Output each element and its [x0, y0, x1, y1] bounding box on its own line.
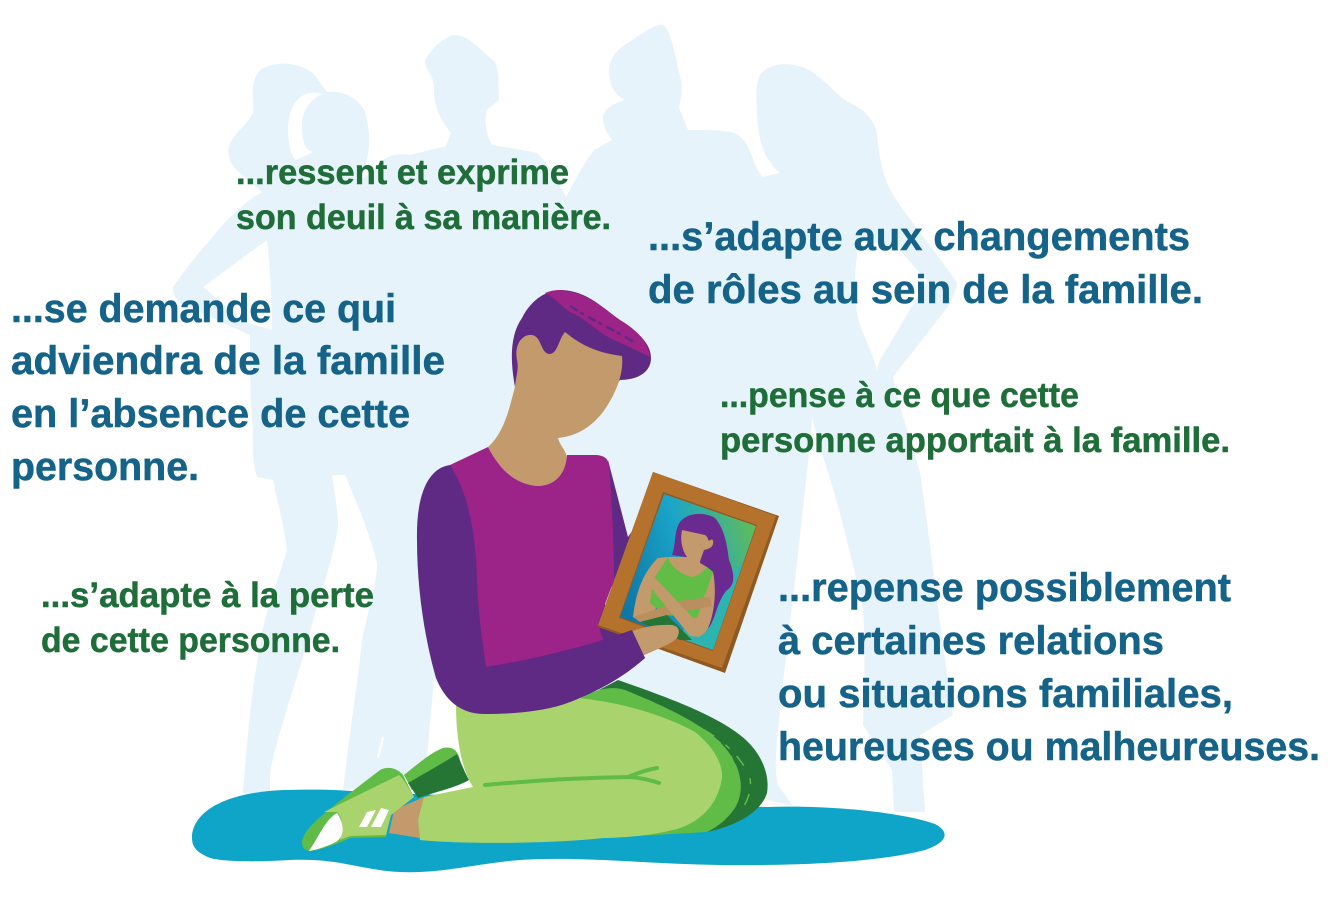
background family silhouettes: [173, 25, 957, 812]
portrait background: [620, 494, 756, 650]
illustration: kneeling person holding a portrait: [302, 290, 779, 851]
text: se demande ce qui adviendra: en l’absence de cette: [11, 392, 410, 436]
trouser crease: [485, 768, 659, 785]
text: repense possiblement: ou situations familiales,: [778, 672, 1233, 716]
trouser shading texture: [640, 693, 742, 827]
back shoe: [404, 748, 469, 798]
white toe cap: [309, 813, 343, 851]
sleeve and arm: [417, 465, 645, 714]
white gap: between hair and child head: [288, 93, 322, 160]
hair highlight: [545, 290, 650, 357]
bare ankle: [389, 797, 424, 838]
white shoe stripes: [359, 808, 389, 827]
white gap: right arm: [855, 240, 927, 370]
text: se demande ce qui adviendra: adviendra de la famille: [11, 339, 445, 383]
hair: [512, 290, 651, 400]
far arm behind the frame: [608, 460, 650, 600]
sweater: [450, 447, 614, 667]
text: s'adapte aux changements: de rôles au sein de la famille.: [648, 268, 1203, 312]
text: s'adapte aux changements: [648, 215, 1203, 312]
front shoe: [302, 768, 414, 851]
text: se demande ce qui adviendra: personne.: [11, 445, 199, 489]
text: se demande ce qui adviendra: [11, 287, 445, 489]
text: s'adapte à la perte: de cette personne.: [41, 621, 340, 660]
puddle: [192, 790, 945, 872]
face and neck: [488, 332, 622, 486]
text: s'adapte aux changements: ...s’adapte aux changements: [648, 215, 1190, 259]
text: repense possiblement: à certaines relations: [778, 619, 1164, 663]
trousers: [418, 680, 768, 843]
white sliver on leg: [377, 737, 384, 758]
white gap: left arm: [203, 240, 272, 330]
picture frame: [598, 472, 779, 673]
text: pense à ce que cette personne apportait: personne apportait à la famille.: [720, 421, 1230, 460]
text: ressent et exprime: ...ressent et exprime: [236, 153, 569, 192]
hair texture: [570, 306, 634, 342]
text: se demande ce qui adviendra: ...se demande ce qui: [11, 287, 396, 331]
text: repense possiblement: heureuses ou malheureuses.: [778, 725, 1320, 769]
text: ressent et exprime: [236, 153, 611, 237]
forearm cuff: [486, 630, 645, 702]
text: pense à ce que cette personne apportait: [720, 376, 1230, 460]
text: s'adapte à la perte: [41, 576, 374, 660]
text: repense possiblement: ...repense possiblement: [778, 566, 1231, 610]
hand: [630, 625, 679, 657]
text: s'adapte à la perte: ...s’adapte à la perte: [41, 576, 374, 615]
text: repense possiblement: [778, 566, 1320, 769]
text: ressent et exprime: son deuil à sa manière.: [236, 198, 611, 237]
text: pense à ce que cette personne apportait: ...pense à ce que cette: [720, 376, 1079, 415]
portrait of a woman: [633, 514, 733, 640]
